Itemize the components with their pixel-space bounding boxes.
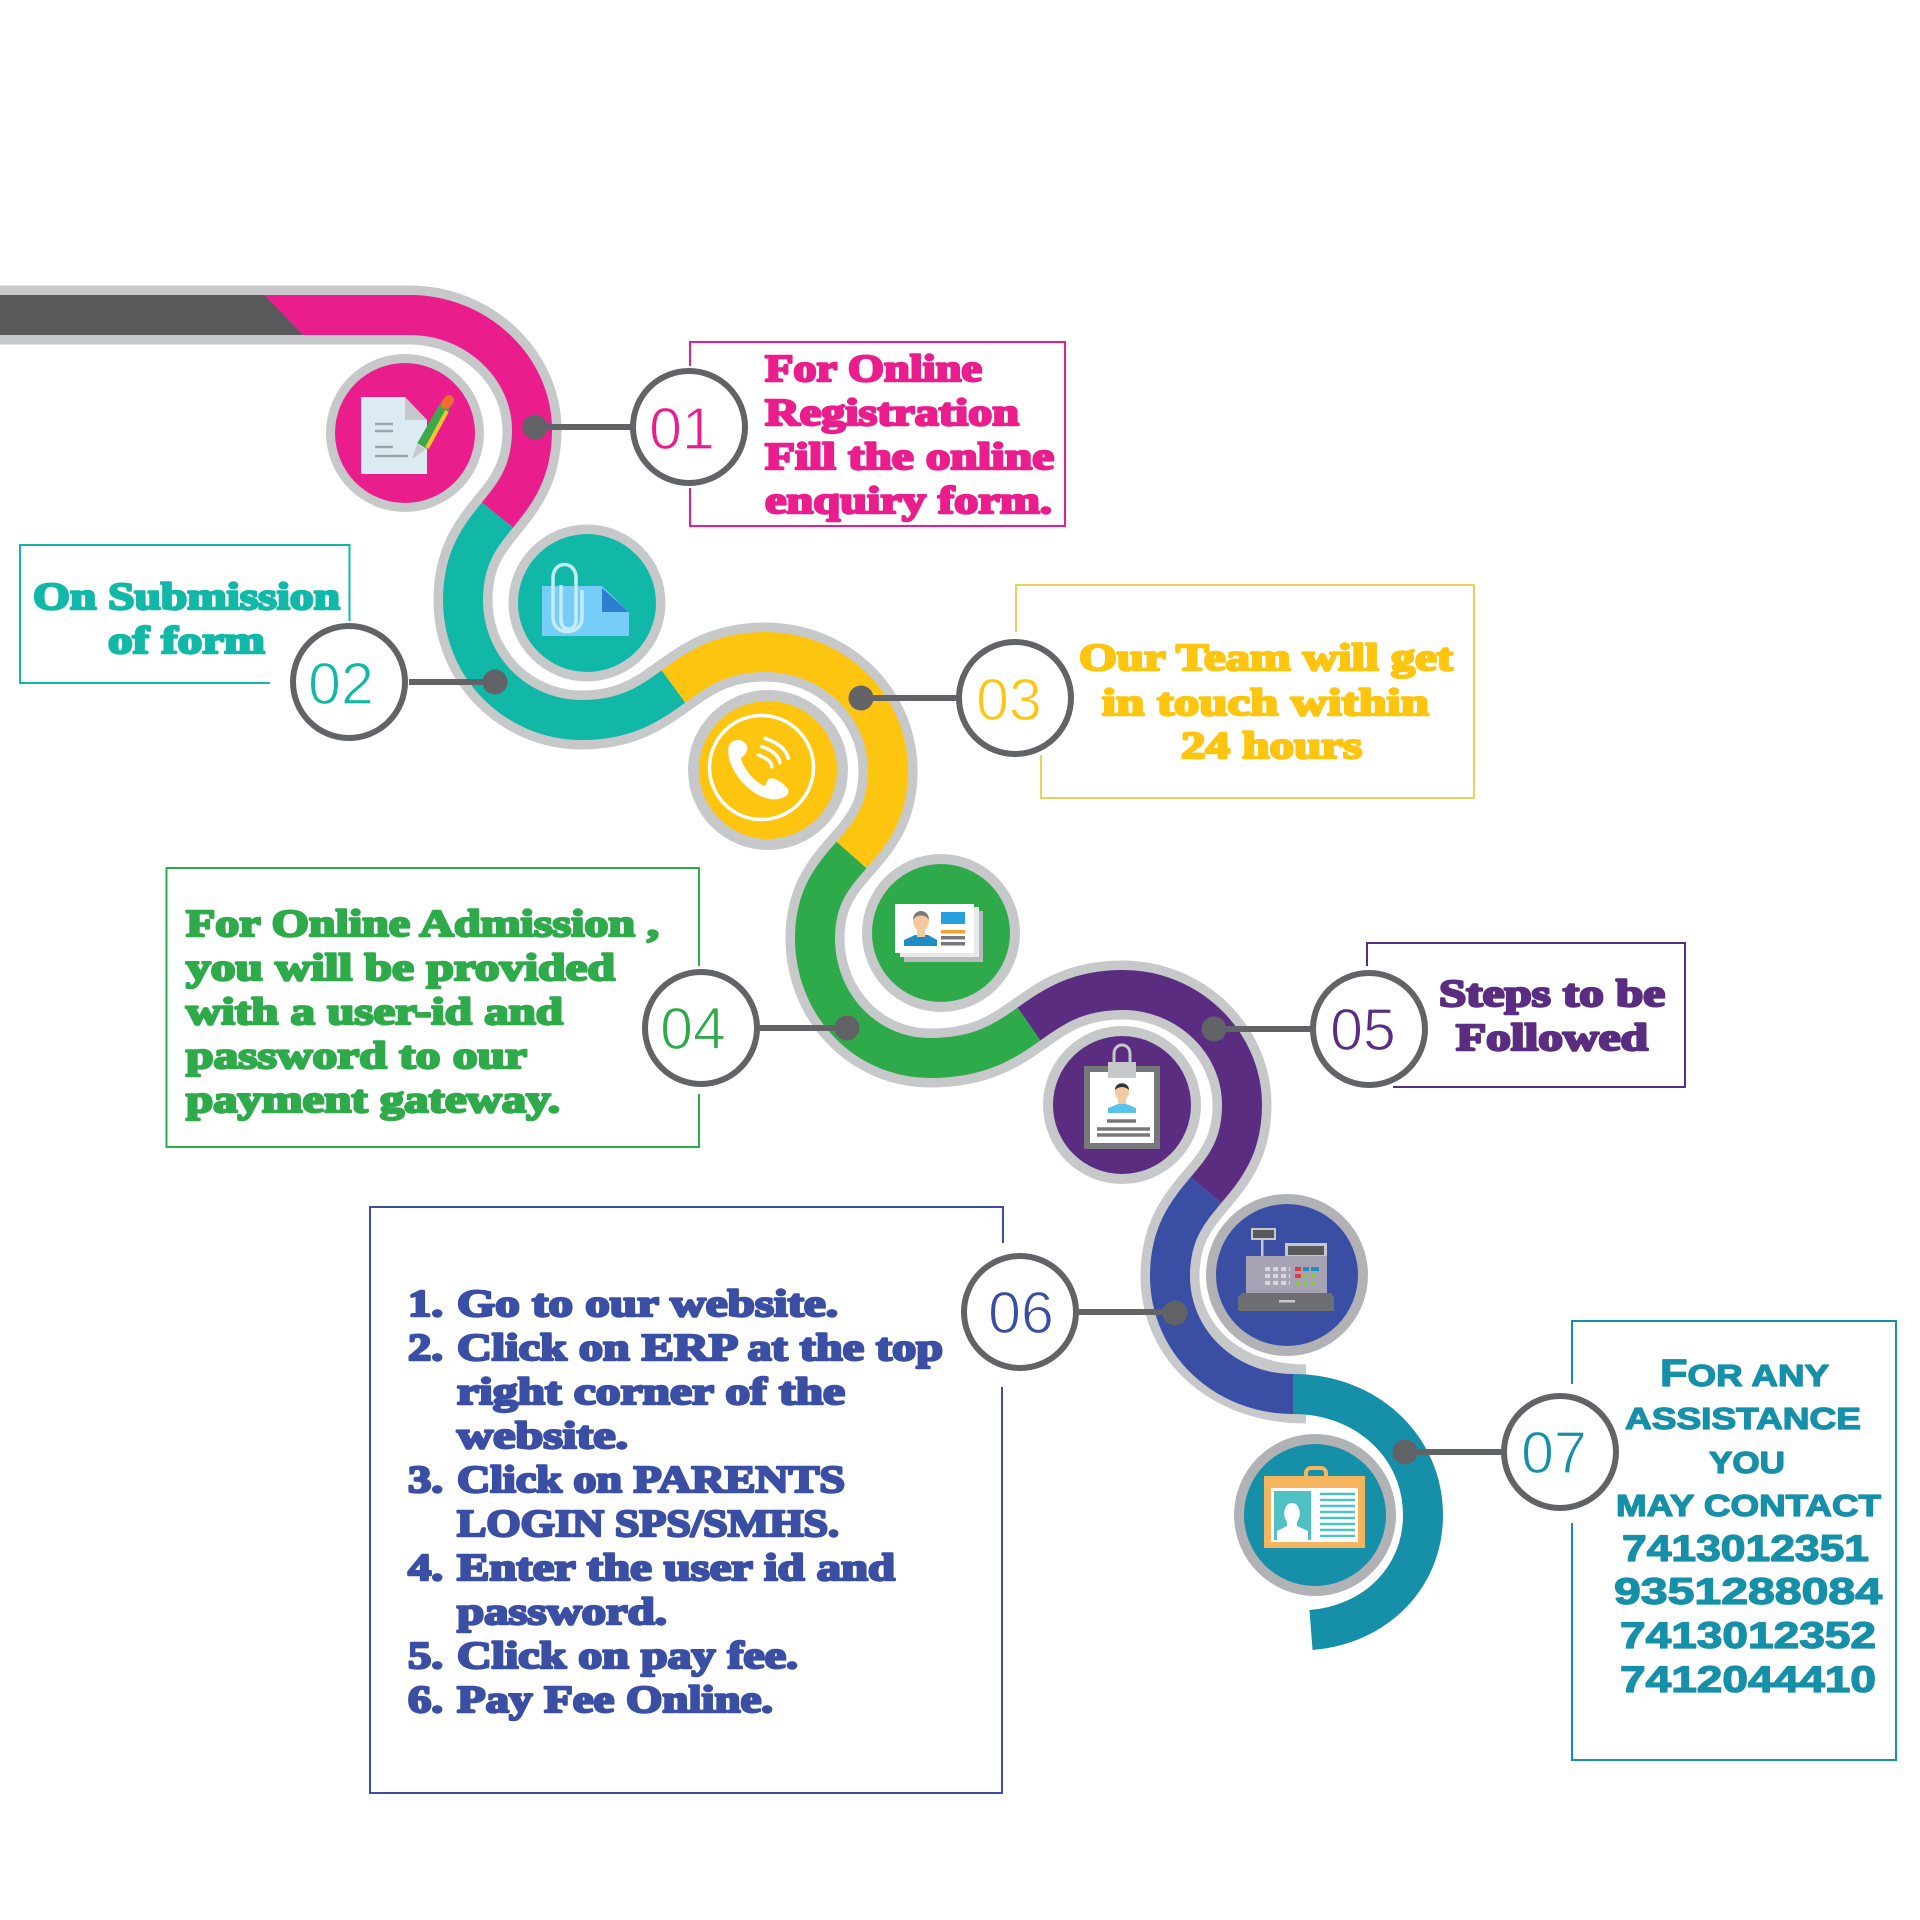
text box 02 outline	[20, 545, 350, 683]
number 05: 05	[1330, 997, 1396, 1063]
text: step 01: Fill the online	[765, 436, 1054, 478]
text: step 07 contact: 9351288084	[1614, 1571, 1883, 1612]
number 03	[959, 642, 1071, 754]
connector 06	[1076, 1300, 1188, 1326]
step 6: pay fee online	[370, 1194, 1368, 1793]
text: step 06 list: Pay Fee Online.	[457, 1679, 773, 1721]
text: step 06 list: Click on pay fee.	[457, 1635, 798, 1677]
text: step 07 contact	[1614, 1353, 1883, 1700]
text: step 06 list: right corner of the	[457, 1371, 845, 1413]
icon: paperclip note	[508, 524, 666, 682]
text: step 07 contact: 7412044410	[1620, 1659, 1876, 1700]
text: step 03	[1079, 637, 1453, 767]
text: step 04: you will be provided	[186, 947, 615, 989]
connector 03	[848, 686, 958, 710]
step 7: contact	[1234, 1321, 1896, 1760]
text: step 04: payment gateway.	[186, 1079, 560, 1121]
text: step 05: Followed	[1456, 1017, 1648, 1059]
text: step 01: For Online	[765, 348, 982, 390]
connector 05	[1202, 1016, 1313, 1042]
text: step 03: 24 hours	[1181, 725, 1362, 767]
text: step 04: password to our	[186, 1035, 527, 1077]
text: step 02: of form	[108, 620, 265, 662]
text: step 06 list: password.	[457, 1591, 667, 1633]
text: step 06 list: Enter the user id and	[457, 1547, 895, 1589]
text box 01 outline	[690, 342, 1065, 526]
text: step 07 contact: YOU	[1709, 1445, 1785, 1480]
text: step 05: Steps to be	[1439, 973, 1665, 1015]
text: step 07 contact: FOR ANY	[1660, 1353, 1829, 1395]
text: step 06 list: website.	[457, 1415, 628, 1457]
text: step 06 list: Go to our website.	[457, 1283, 838, 1325]
icon: phone	[688, 690, 848, 850]
text: step 02: On Submission	[33, 576, 340, 618]
step 5: follow the steps	[1043, 943, 1685, 1184]
text: step 03: Our Team will get	[1079, 637, 1453, 679]
text: step 06 list: LOGIN SPS/SMHS.	[457, 1503, 839, 1545]
number 01	[633, 371, 745, 483]
text: step 07 contact: 7413012352	[1620, 1615, 1876, 1656]
number 07	[1504, 1396, 1616, 1508]
number 02	[293, 626, 405, 738]
step 1: registration	[326, 342, 1065, 526]
number 06	[964, 1256, 1076, 1368]
text: step 06 list: 3.	[408, 1459, 443, 1501]
connector 01	[522, 414, 632, 440]
icon: cash register	[1206, 1194, 1368, 1356]
icon: document and pen	[326, 354, 484, 512]
text: step 06 list: 1.	[408, 1283, 443, 1325]
connector 04	[758, 1016, 860, 1040]
number 03: 03	[976, 667, 1042, 733]
text: step 07 contact: ASSISTANCE	[1625, 1401, 1861, 1436]
icon: clipboard badge	[1043, 1026, 1201, 1184]
number 05	[1313, 973, 1425, 1085]
winding road ribbon	[0, 295, 1423, 1630]
number 06: 06	[988, 1280, 1054, 1346]
text box 04 outline	[166, 868, 699, 1147]
step 2: submission	[20, 524, 666, 738]
text: step 04: For Online Admission ,	[186, 903, 659, 945]
number 04: 04	[660, 996, 726, 1062]
icon: ID card	[1234, 1434, 1396, 1596]
number 07: 07	[1521, 1420, 1587, 1486]
text: step 05	[1439, 973, 1665, 1059]
number 04	[645, 972, 757, 1084]
text: step 02	[33, 576, 340, 662]
text: step 06 list	[408, 1283, 943, 1721]
connector 07	[1392, 1440, 1503, 1464]
text: step 01	[765, 348, 1054, 522]
text: step 06 list: 5.	[408, 1635, 443, 1677]
text: step 01: enquiry form.	[765, 480, 1052, 522]
text: step 04: with a user-id and	[186, 991, 563, 1033]
text: step 07 contact: 7413012351	[1622, 1528, 1869, 1569]
text: step 06 list: 4.	[408, 1547, 443, 1589]
number 02: 02	[308, 651, 374, 717]
text: step 03: in touch within	[1102, 682, 1429, 724]
step 3: team call	[688, 585, 1474, 850]
text: step 06 list: 2.	[408, 1327, 443, 1369]
text: step 06 list: Click on PARENTS	[457, 1459, 845, 1501]
connector 02	[409, 670, 508, 694]
text: step 06 list: Click on ERP at the top	[457, 1327, 943, 1369]
text box 06 outline	[370, 1207, 1003, 1793]
text box 03 outline	[1016, 585, 1474, 798]
text box 07 outline	[1572, 1321, 1896, 1760]
text: step 07 contact: MAY CONTACT	[1616, 1488, 1881, 1523]
icon: profile cards	[862, 854, 1020, 1012]
text box 05 outline	[1367, 943, 1685, 1087]
text: step 01: Registration	[765, 392, 1019, 434]
text: step 04	[186, 903, 659, 1121]
text: step 06 list: 6.	[408, 1679, 443, 1721]
step 4: online admission	[166, 854, 1020, 1147]
number 01: 01	[649, 396, 715, 462]
